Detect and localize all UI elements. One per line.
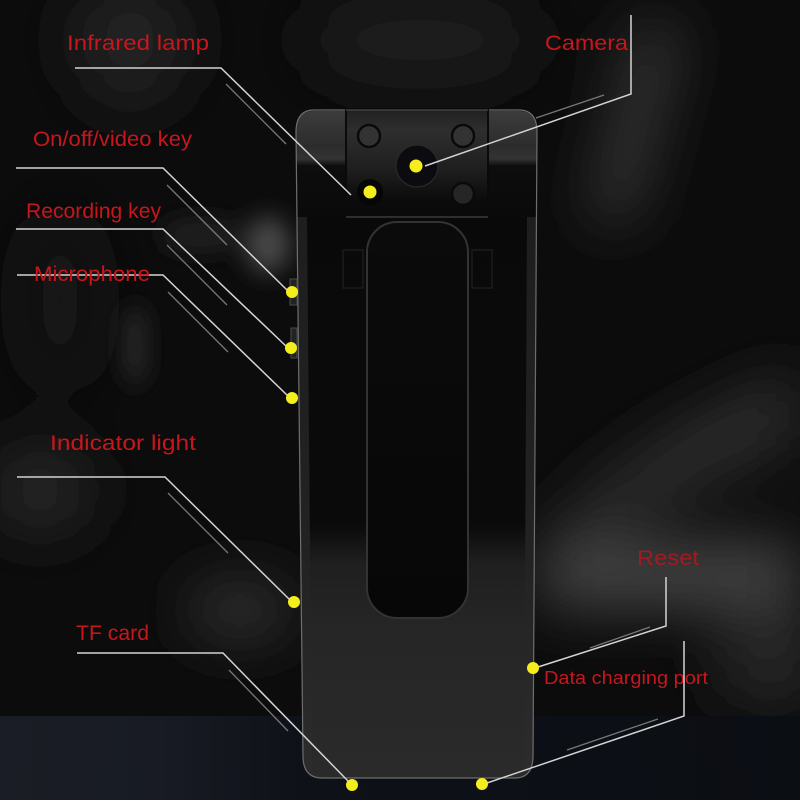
callout: Reset bbox=[527, 547, 699, 674]
camera head bbox=[346, 109, 488, 217]
side tabs bbox=[343, 250, 363, 288]
callout: Camera bbox=[410, 15, 631, 172]
button: top right bbox=[452, 125, 474, 147]
button: lower right bbox=[452, 183, 474, 205]
side key 1 bbox=[290, 279, 297, 305]
right edge strip bbox=[524, 217, 537, 770]
device outline bbox=[296, 110, 537, 778]
callout: Microphone bbox=[17, 263, 298, 404]
left edge strip bbox=[297, 217, 312, 770]
right hinge bbox=[488, 111, 537, 217]
callout: Recording key: Recording key bbox=[26, 200, 162, 223]
callout: TF card bbox=[76, 622, 358, 791]
infrared lamp bbox=[357, 179, 383, 205]
button: top left bbox=[358, 125, 380, 147]
callout: Microphone: Microphone bbox=[34, 263, 150, 286]
device body bbox=[290, 109, 537, 778]
lens bbox=[396, 145, 438, 187]
callout: On/off/video key bbox=[16, 128, 298, 298]
callout: Infrared lamp bbox=[67, 32, 376, 198]
callout: Camera: Camera bbox=[545, 32, 628, 55]
callout: Data charging port: Data charging port bbox=[544, 668, 708, 688]
callout: Infrared lamp: Infrared lamp bbox=[67, 32, 209, 55]
callout: Indicator light: Indicator light bbox=[50, 432, 196, 455]
callout: TF card: TF card bbox=[76, 622, 149, 645]
callout: Indicator light bbox=[17, 432, 300, 608]
callout: Reset: Reset bbox=[637, 547, 699, 570]
left hinge bbox=[296, 111, 345, 217]
side key 2 bbox=[291, 328, 297, 358]
callout: On/off/video key: On/off/video key bbox=[33, 128, 193, 151]
belt clip bbox=[367, 222, 468, 618]
callout: Data charging port bbox=[476, 641, 708, 790]
callout: Recording key bbox=[16, 200, 297, 354]
